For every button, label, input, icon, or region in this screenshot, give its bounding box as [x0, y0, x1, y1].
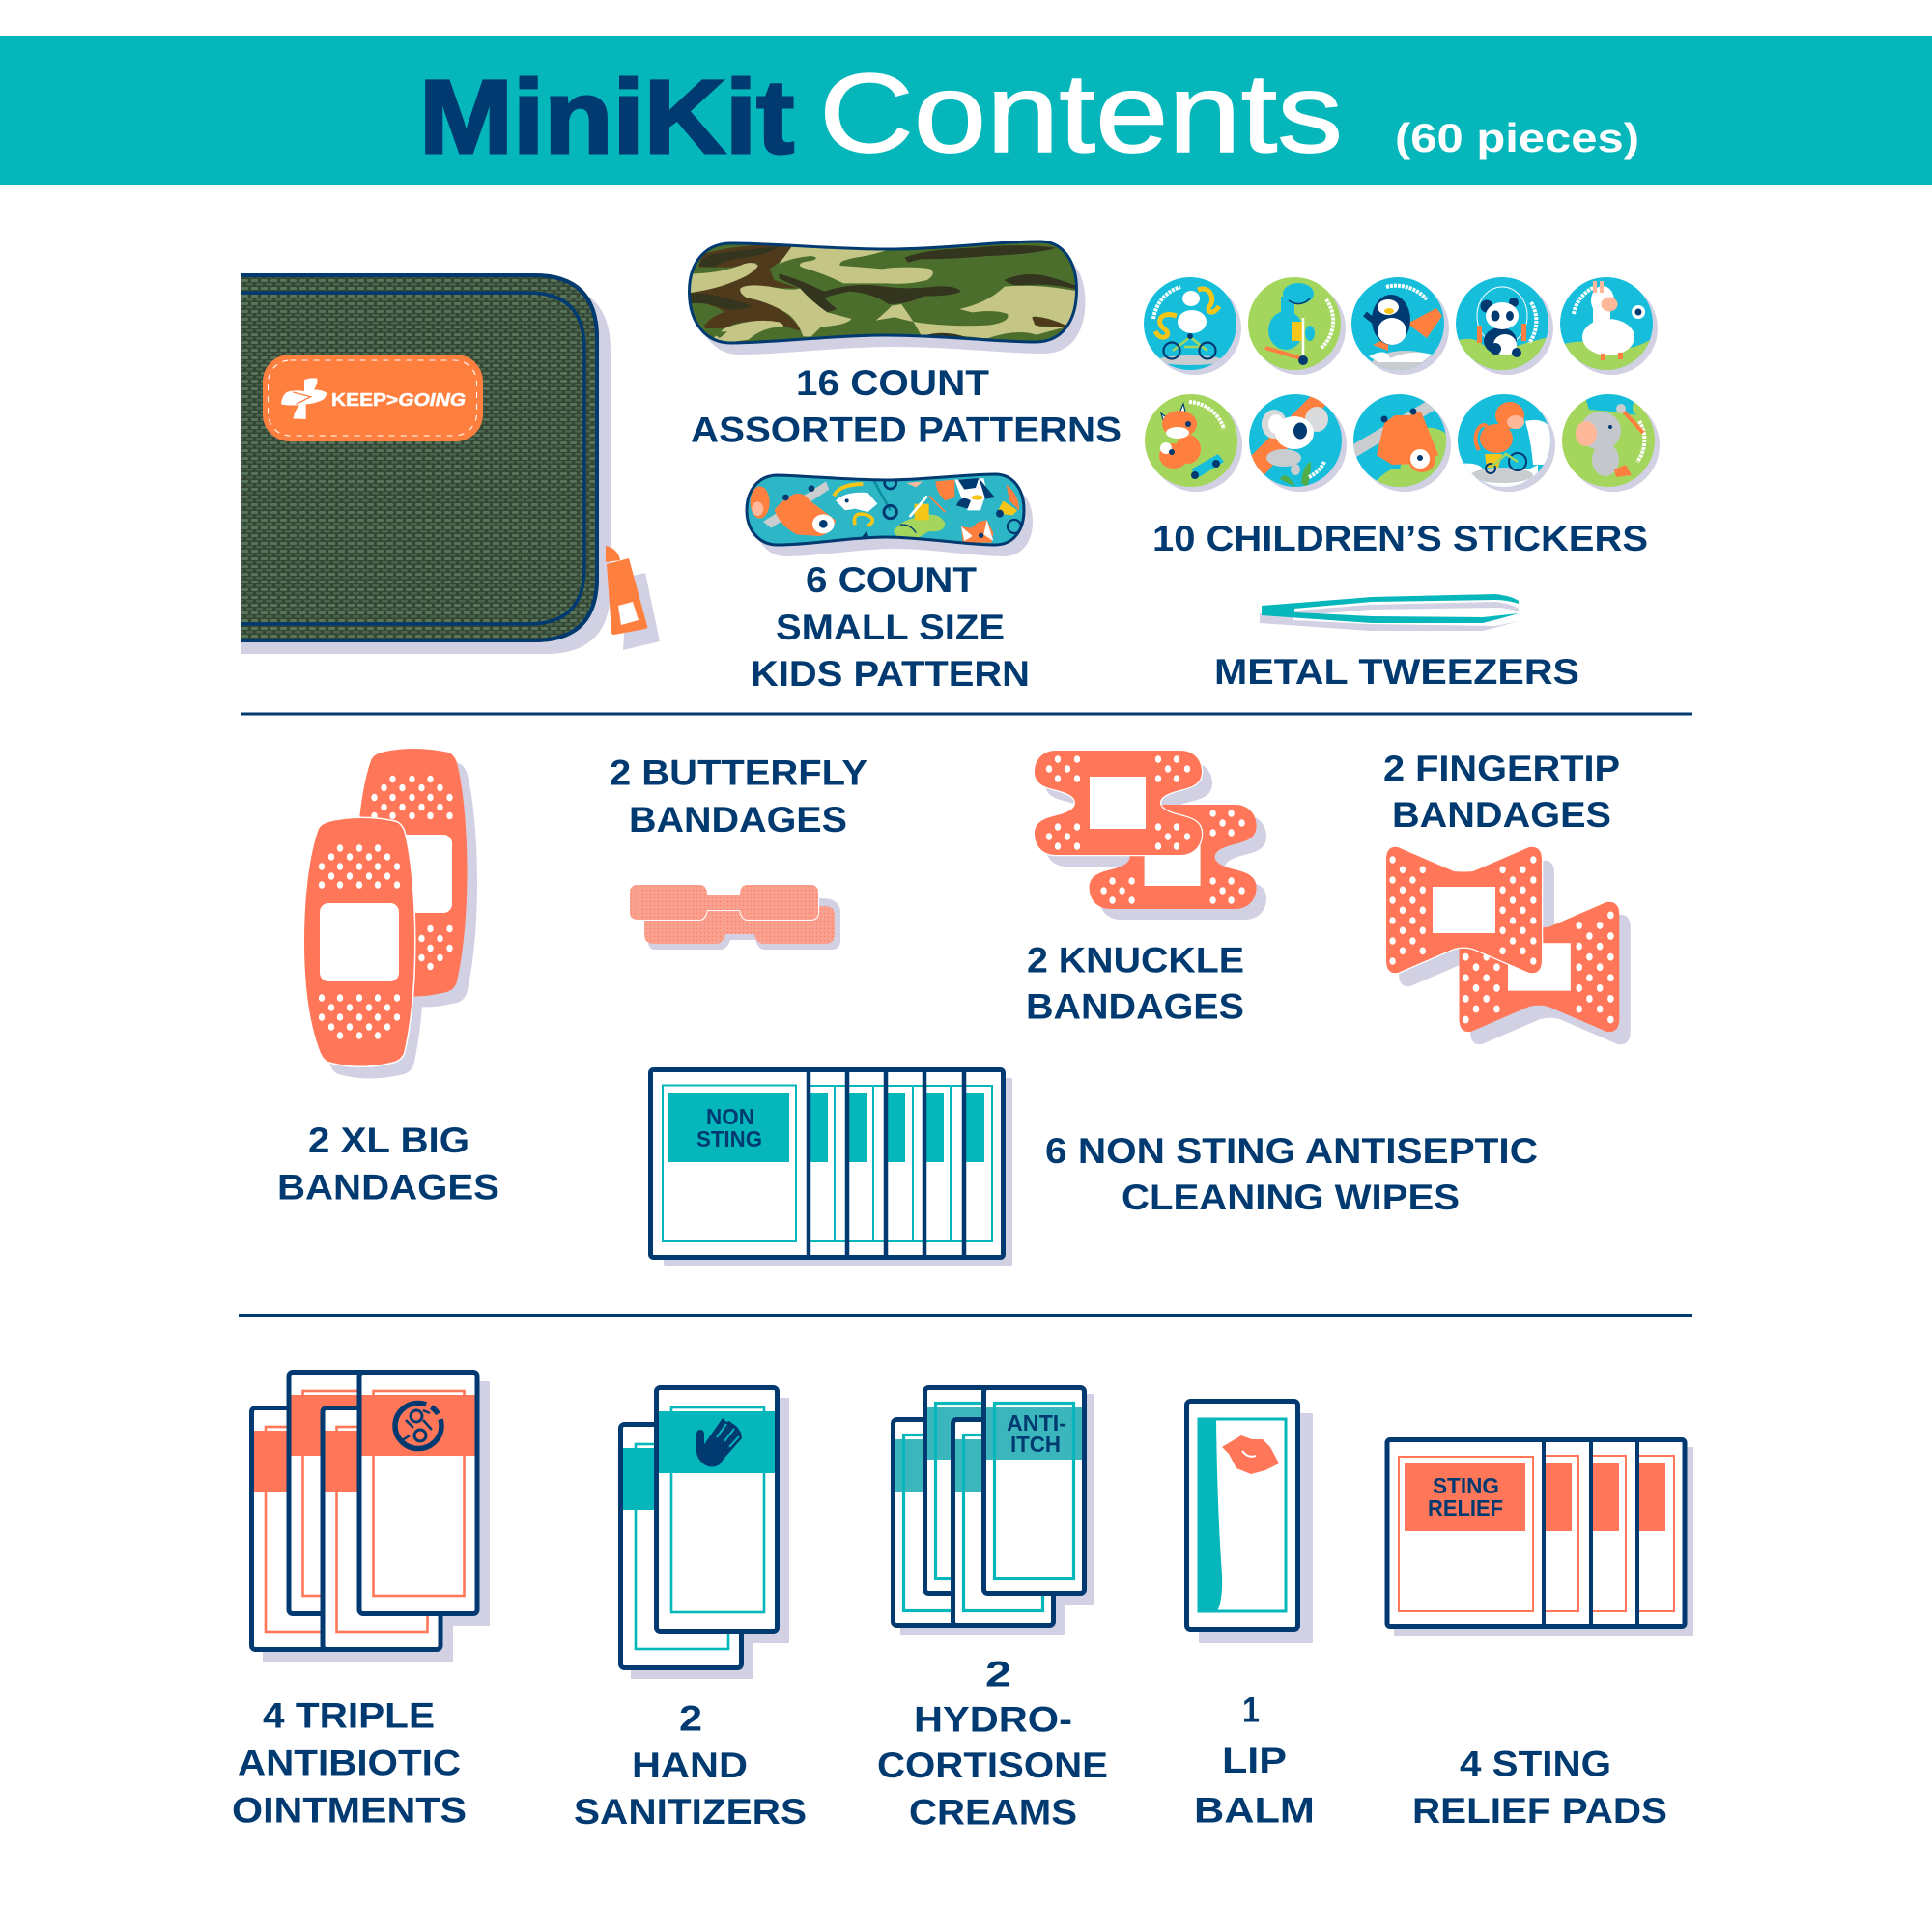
icon: lip balm [1186, 1401, 1313, 1643]
text: sting relief: STING [1433, 1473, 1499, 1498]
text: non sting: STING [696, 1126, 762, 1151]
icon: lips [1222, 1435, 1279, 1474]
label: 6 count small size kids pattern: SMALL SIZE [776, 608, 1005, 647]
sticker: monkey on bike [1458, 394, 1555, 492]
icon: butterfly bandages [630, 885, 840, 950]
orange logo patch [263, 355, 483, 441]
label: 1 lip balm: LIP [1222, 1741, 1287, 1780]
sticker: dinosaur on scooter [1248, 277, 1346, 375]
sticker: llama with soccer ball [1560, 277, 1658, 375]
label: 1 lip balm: BALM [1194, 1791, 1315, 1830]
label: 4 sting relief pads: RELIEF PADS [1412, 1791, 1667, 1831]
label: 6 count small size kids pattern: KIDS PATTERN [751, 654, 1030, 694]
label: 2 hand sanitizers: SANITIZERS [574, 1792, 807, 1832]
piece count: (60 pieces) [1395, 115, 1639, 160]
text: anti-itch [1007, 1410, 1066, 1457]
label: 1 lip balm [1194, 1690, 1315, 1830]
label: 2 hydrocortisone creams: CORTISONE [877, 1746, 1108, 1785]
label: 16 count assorted patterns: 16 COUNT [796, 363, 989, 403]
label: 2 fingertip bandages: BANDAGES [1392, 795, 1611, 835]
header banner with title [0, 36, 1932, 185]
icon: sting relief pads [1387, 1439, 1693, 1636]
icon: hand [696, 1418, 742, 1466]
icon: fingertip bandages [1386, 847, 1631, 1044]
label: 2 hand sanitizers: 2 [679, 1698, 702, 1739]
label: 16 count assorted patterns: ASSORTED PATTERNS [691, 410, 1122, 450]
label: 4 triple antibiotic ointments: 4 TRIPLE [263, 1696, 435, 1735]
camouflage bandage [688, 240, 1086, 355]
label: 2 knuckle bandages: BANDAGES [1026, 987, 1244, 1026]
label: 2 XL big bandages [277, 1121, 499, 1208]
label: 10 children's stickers: 10 CHILDREN’S STICKERS [1152, 519, 1648, 558]
kids pattern bandage [739, 469, 1038, 556]
icon: hand sanitizers [620, 1387, 789, 1679]
label: 4 sting relief pads [1412, 1745, 1667, 1831]
label: 2 hand sanitizers [574, 1698, 807, 1832]
label: 4 sting relief pads: 4 STING [1460, 1745, 1611, 1783]
label: 16 count assorted patterns [691, 363, 1122, 450]
title: MiniKit: MiniKit [419, 58, 794, 175]
label: 2 butterfly bandages: BANDAGES [629, 800, 847, 839]
label: 4 triple antibiotic ointments: ANTIBIOTIC [238, 1743, 461, 1783]
label: 2 fingertip bandages [1383, 749, 1620, 835]
icon: two XL big bandages [304, 749, 477, 1078]
text: sting relief [1428, 1473, 1503, 1520]
sticker: elephant with hammer [1562, 394, 1660, 492]
label: 2 butterfly bandages: 2 BUTTERFLY [610, 753, 867, 792]
label: 6 count small size kids pattern [751, 560, 1030, 694]
sticker: sloth hanging [1351, 394, 1451, 492]
icon: triple antibiotic ointments [251, 1372, 490, 1662]
label: metal tweezers: METAL TWEEZERS [1214, 652, 1579, 692]
title: Contents: Contents [819, 50, 1343, 176]
label: 2 knuckle bandages: 2 KNUCKLE [1027, 941, 1244, 980]
label: 2 hydrocortisone creams [877, 1654, 1108, 1832]
text: anti-itch: ITCH [1010, 1432, 1061, 1457]
text: anti-itch: ANTI- [1007, 1410, 1066, 1435]
label: 2 hand sanitizers: HAND [632, 1746, 748, 1785]
label: 4 triple antibiotic ointments [232, 1696, 467, 1830]
text: non sting: NON [706, 1104, 754, 1129]
text: sting relief: RELIEF [1428, 1495, 1503, 1520]
label: 6 non sting antiseptic cleaning wipes [1045, 1131, 1538, 1217]
sticker: fox on skateboard [1145, 394, 1242, 492]
label: 4 triple antibiotic ointments: OINTMENTS [232, 1791, 467, 1830]
label: 6 count small size kids pattern: 6 COUNT [806, 560, 977, 600]
sticker: penguin on board [1351, 277, 1449, 382]
children's stickers [1144, 277, 1660, 492]
text: non sting [696, 1104, 762, 1151]
label: 2 XL big bandages: BANDAGES [277, 1167, 499, 1208]
label: 2 XL big bandages: 2 XL BIG [308, 1121, 469, 1160]
label: 1 lip balm: 1 [1242, 1690, 1260, 1729]
pouch: green fabric case with orange label [241, 273, 660, 654]
icon: knuckle bandages [1035, 751, 1266, 920]
icon: hydrocortisone creams [893, 1387, 1094, 1635]
label: 2 hydrocortisone creams: 2 [985, 1654, 1011, 1694]
label: 2 butterfly bandages [610, 753, 867, 839]
zipper pull [606, 546, 660, 650]
label: 2 hydrocortisone creams: HYDRO- [914, 1700, 1072, 1739]
icon: non sting wipes [651, 1068, 1012, 1266]
icon: metal tweezers [1260, 594, 1519, 631]
sticker: panda skipping rope [1456, 277, 1553, 375]
sticker: koala on branch [1247, 392, 1347, 492]
icon: germ [395, 1403, 441, 1449]
label: 6 non sting antiseptic cleaning wipes: CLEANING WIPES [1122, 1178, 1460, 1217]
sticker: unicorn on bike [1144, 277, 1241, 375]
label: 2 hydrocortisone creams: CREAMS [909, 1793, 1077, 1832]
label: 2 knuckle bandages [1026, 941, 1244, 1026]
orange logo patch: KEEP> GOING [331, 389, 466, 410]
label: 2 fingertip bandages: 2 FINGERTIP [1383, 749, 1620, 788]
label: 6 non sting antiseptic cleaning wipes: 6 NON STING ANTISEPTIC [1045, 1131, 1538, 1171]
